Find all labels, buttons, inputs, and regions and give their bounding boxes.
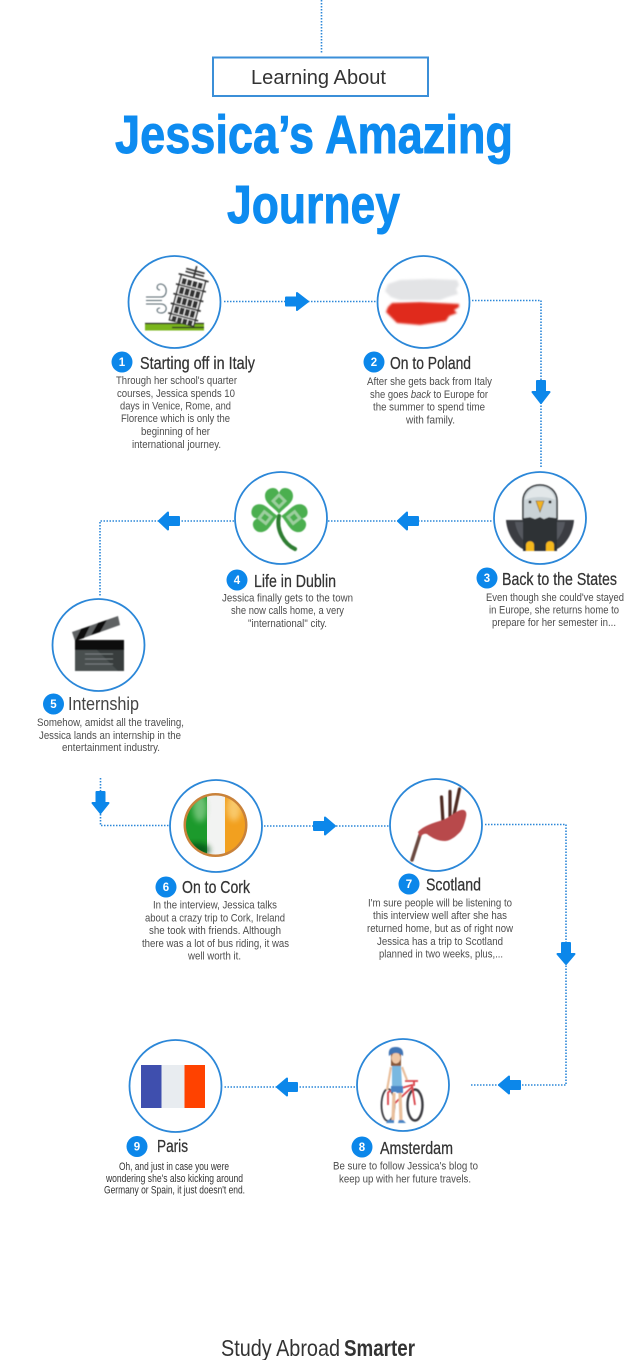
connector: Internship to Cork xyxy=(92,778,170,826)
description 7: Jessica has a trip to Scotland xyxy=(377,936,503,948)
number badge 8 xyxy=(352,1136,372,1158)
description 5: entertainment industry. xyxy=(62,742,160,754)
number badge 6: 6 xyxy=(163,882,169,894)
step 8: Amsterdam xyxy=(333,1039,478,1186)
description 2: the summer to spend time xyxy=(373,402,485,414)
icon: cyclist with bicycle xyxy=(357,1039,449,1131)
number badge 3 xyxy=(476,568,498,588)
connector: top line xyxy=(320,0,322,54)
description 6: about a crazy trip to Cork, Ireland xyxy=(145,912,285,924)
number badge 2 xyxy=(364,352,384,372)
step 3: Back to the States xyxy=(476,472,624,629)
icon: film clapperboard xyxy=(52,599,144,691)
description 6: she took with friends. Although xyxy=(149,925,281,937)
number badge 6 xyxy=(156,876,176,898)
connector: Italy to Poland xyxy=(224,293,377,310)
description 7: returned home, but as of right now xyxy=(367,923,513,935)
title: Jessica’s Amazing xyxy=(115,105,513,165)
heading: Starting off in Italy: Starting off in Italy xyxy=(140,353,255,373)
connector: Scotland to Amsterdam xyxy=(470,824,574,1094)
number badge 9 xyxy=(126,1136,148,1157)
heading: Scotland: Scotland xyxy=(426,874,481,894)
number badge 5 xyxy=(43,694,64,714)
heading: On to Poland: On to Poland xyxy=(390,353,471,373)
description 8: Be sure to follow Jessica's blog to xyxy=(333,1160,478,1172)
description 7: I'm sure people will be listening to xyxy=(368,898,512,910)
description 8: keep up with her future travels. xyxy=(339,1174,471,1186)
description 2: she goes back to Europe for xyxy=(370,389,488,401)
step 6: On to Cork xyxy=(142,780,289,962)
description 1: Florence which is only the xyxy=(121,413,230,425)
description 2: After she gets back from Italy xyxy=(367,376,493,388)
icon: Polish flag brush strokes xyxy=(378,256,470,348)
icon: bald eagle xyxy=(494,472,586,564)
number badge 2: 2 xyxy=(371,357,377,369)
heading: Internship: Internship xyxy=(68,694,139,714)
icon: Irish flag badge xyxy=(170,780,262,872)
connector: Cork to Scotland xyxy=(264,818,390,834)
icon: shamrock xyxy=(235,472,327,564)
connector: Amsterdam to Paris xyxy=(224,1078,355,1096)
description 4: Jessica finally gets to the town xyxy=(222,592,353,604)
step 2: Poland xyxy=(364,256,493,426)
description 3: prepare for her semester in... xyxy=(492,617,616,629)
description 6: In the interview, Jessica talks xyxy=(153,900,277,912)
step 1: Italy xyxy=(112,256,255,451)
description 6: well worth it. xyxy=(187,950,241,962)
description 9 xyxy=(104,1161,245,1196)
heading: Paris: Paris xyxy=(157,1136,188,1156)
description 6: there was a lot of bus riding, it was xyxy=(142,938,289,950)
description 2 xyxy=(367,376,493,426)
icon: leaning tower of Pisa xyxy=(128,256,220,348)
description 1: Through her school's quarter xyxy=(116,375,237,387)
description 1: beginning of her xyxy=(141,426,210,438)
description 1: days in Venice, Rome, and xyxy=(120,400,231,412)
description 9: Germany or Spain, it just doesn't end. xyxy=(104,1184,245,1196)
description 7: planned in two weeks, plus,... xyxy=(379,948,503,960)
title: Journey xyxy=(227,175,400,235)
description 9: wondering she's also kicking around xyxy=(105,1173,243,1185)
heading: Back to the States: Back to the States xyxy=(502,569,617,589)
description 4 xyxy=(222,592,353,630)
description 3: Even though she could've stayed xyxy=(486,592,624,604)
number badge 3: 3 xyxy=(484,573,490,585)
description 2: with family. xyxy=(405,414,455,426)
connector: Dublin to Internship xyxy=(100,512,234,597)
title xyxy=(115,105,513,235)
description 4: she now calls home, a very xyxy=(231,605,345,617)
description 5: Somehow, amidst all the traveling, xyxy=(37,717,184,729)
number badge 8: 8 xyxy=(359,1142,366,1154)
step 7: Scotland xyxy=(367,779,513,960)
number badge 5: 5 xyxy=(50,699,57,711)
number badge 1: 1 xyxy=(119,357,126,369)
heading: Life in Dublin: Life in Dublin xyxy=(254,571,336,591)
step 4: Life in Dublin xyxy=(222,472,353,630)
step 5: Internship xyxy=(37,599,184,754)
connector: States to Dublin xyxy=(328,512,493,530)
subtitle box xyxy=(213,58,428,96)
description 3 xyxy=(486,592,624,629)
description 9: Oh, and just in case you were xyxy=(119,1161,229,1173)
heading: Amsterdam: Amsterdam xyxy=(380,1138,453,1158)
icon: bagpipes xyxy=(390,779,482,871)
subtitle box: Learning About xyxy=(251,66,386,89)
heading: On to Cork: On to Cork xyxy=(182,877,250,897)
icon: French flag xyxy=(130,1040,222,1132)
description 1: courses, Jessica spends 10 xyxy=(117,388,235,400)
description 1: international journey. xyxy=(132,439,221,451)
description 8 xyxy=(333,1160,478,1186)
number badge 1 xyxy=(112,352,132,372)
step 9: Paris xyxy=(104,1040,245,1196)
description 1 xyxy=(116,375,237,451)
description 7 xyxy=(367,898,513,960)
number badge 7: 7 xyxy=(406,879,412,891)
description 7: this interview well after she has xyxy=(373,910,507,922)
number badge 7 xyxy=(398,874,420,894)
description 4: "international" city. xyxy=(248,618,327,630)
description 3: in Europe, she returns home to xyxy=(489,604,619,616)
number badge 4 xyxy=(226,570,248,590)
number badge 9: 9 xyxy=(134,1142,140,1154)
description 5 xyxy=(37,717,184,754)
number badge 4: 4 xyxy=(234,575,241,587)
description 6 xyxy=(142,900,289,962)
connector: Poland to States xyxy=(472,300,550,468)
description 5: Jessica lands an internship in the xyxy=(39,730,181,742)
